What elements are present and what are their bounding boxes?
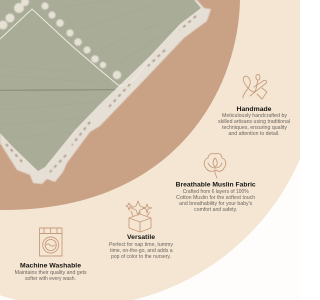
icon: craft tools	[243, 74, 267, 99]
description: pop of color to the nursery.	[111, 254, 171, 260]
description: Crafted from 6 layers of 100%	[183, 189, 249, 195]
tan circle backdrop	[0, 0, 240, 210]
blanket fold shadow	[0, 90, 115, 91]
description: comfort and safety.	[194, 207, 237, 213]
folded corner trim	[0, 9, 150, 86]
description: Cotton Muslin for the softest touch	[176, 195, 255, 201]
description: Maintains their quality and gets	[15, 270, 87, 276]
tassels	[0, 0, 121, 79]
feature: Handmade	[218, 74, 290, 137]
feature: Versatile	[109, 201, 173, 260]
description: and attention to detail.	[228, 131, 280, 137]
heading: Machine Washable	[20, 263, 81, 270]
description: softer with every wash.	[25, 276, 76, 282]
icon: cotton flower	[204, 153, 226, 178]
description: and breathability for your baby's	[179, 201, 253, 207]
description: time, on-the-go, and adds a	[110, 248, 173, 254]
description: Meticulously handcrafted by	[222, 113, 287, 119]
blanket photo	[0, 0, 211, 184]
blanket lace edge	[0, 0, 211, 184]
description: techniques, ensuring quality	[222, 125, 287, 131]
description: Perfect for nap time, tummy	[109, 242, 173, 248]
feature: Breathable Muslin Fabric	[176, 153, 256, 213]
feature: Machine Washable	[15, 228, 87, 282]
icon: washing machine	[40, 228, 62, 256]
icon: open box with stars	[126, 201, 152, 232]
blanket body	[0, 0, 201, 171]
description: skilled artisans using traditional	[218, 119, 290, 125]
heading: Versatile	[127, 234, 155, 241]
heading: Breathable Muslin Fabric	[176, 182, 256, 188]
lace shading	[6, 16, 196, 172]
heading: Handmade	[236, 106, 272, 113]
fabric crinkle texture	[0, 0, 178, 138]
